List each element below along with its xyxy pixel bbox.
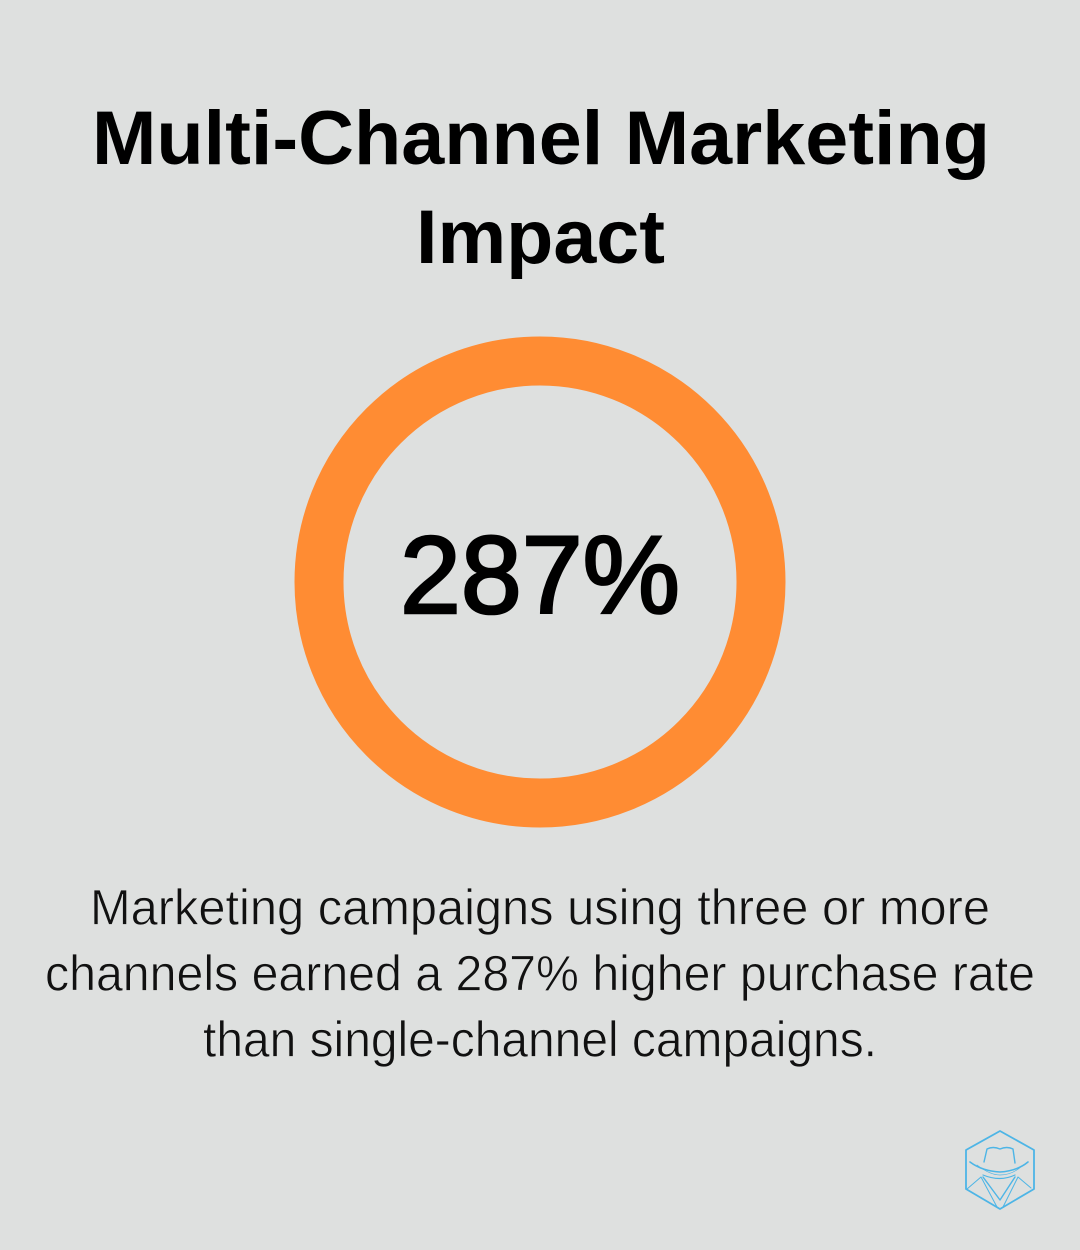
description text: than single-channel campaigns. bbox=[203, 1012, 877, 1068]
title bbox=[92, 96, 990, 280]
donut ring bbox=[319, 361, 761, 803]
ring value: 287%: 287% bbox=[400, 514, 680, 637]
icon: hexagon logo with hat bbox=[966, 1131, 1034, 1209]
description text: Marketing campaigns using three or more bbox=[90, 880, 990, 936]
title: Impact bbox=[416, 195, 665, 280]
description text bbox=[45, 880, 1035, 1068]
description text: channels earned a 287% higher purchase rate bbox=[45, 946, 1035, 1002]
title: Multi-Channel Marketing bbox=[92, 96, 990, 181]
